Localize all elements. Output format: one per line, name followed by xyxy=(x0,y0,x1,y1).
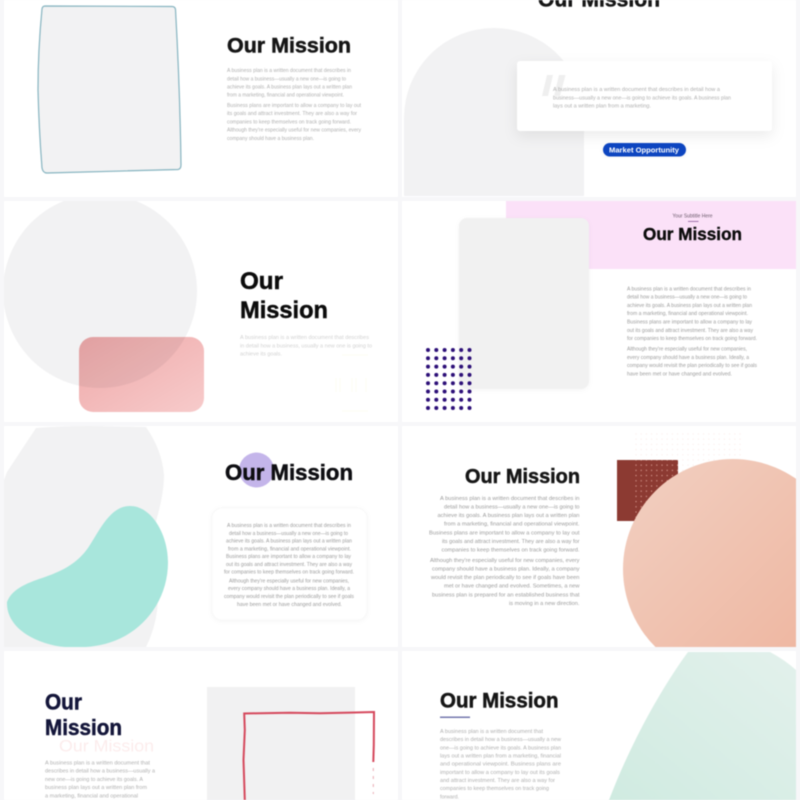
body text, right aligned: is moving in a new direction. xyxy=(509,601,580,607)
mint blob xyxy=(7,506,168,647)
image frame with teal outline xyxy=(38,6,181,173)
body text: its goals and attract investment. They are also a way for xyxy=(227,111,357,117)
body text: for companies to keep themselves on track going forward. xyxy=(627,336,757,342)
heading: Our xyxy=(240,268,283,295)
pink rounded rectangle xyxy=(79,337,204,412)
body text: and operational viewpoint. Business plans are xyxy=(440,762,561,768)
panel: slide 3 xyxy=(78,271,372,412)
body text: lays out a written plan from a marketing, financial xyxy=(440,754,561,760)
panel: slide 2 xyxy=(509,0,731,158)
body text: achieve its goals. A business plan lays out a written plan xyxy=(227,84,352,90)
faint decoration xyxy=(336,355,368,411)
purple dot grid xyxy=(426,348,472,410)
body text, right aligned: met or have changed and evolved. Sometimes, a new xyxy=(444,584,580,590)
heading: Mission xyxy=(45,715,122,740)
body text, right aligned: would revisit the plan periodically to see if goals have been xyxy=(431,575,580,581)
quote card xyxy=(517,61,772,131)
mint organic shape xyxy=(609,652,796,800)
body text: business plan lays out a written plan from xyxy=(45,785,147,791)
card body text: out its goals and attract investment. They are also a way xyxy=(226,562,352,568)
body text: and attract investment. They are also a way for xyxy=(440,778,555,784)
body text: achieve its goals. A business plan lays out a written plan xyxy=(627,303,752,309)
card body text: achieve its goals. A business plan lays out a written plan xyxy=(226,538,352,544)
body text, right aligned: business plan is prepared for an established business that xyxy=(432,592,580,598)
quote text: A business plan is a written document that describes in detail how a xyxy=(553,87,720,93)
card body text: from a marketing, financial and operational viewpoint. xyxy=(228,546,351,552)
ghost heading: Our Mission xyxy=(59,737,154,756)
card body text: company would revisit the plan periodically to see if goals xyxy=(224,594,354,600)
body text, right aligned xyxy=(429,496,580,607)
card body text: Although they're especially useful for new companies, xyxy=(229,578,349,584)
pink header band xyxy=(506,201,796,269)
body text: one—is going to achieve its goals. A business plan xyxy=(440,745,561,751)
body text xyxy=(240,335,372,358)
heading: Our Mission xyxy=(227,34,351,58)
body text xyxy=(627,286,757,377)
heading: Our Mission xyxy=(440,690,558,712)
card body text: every company should have a business plan. Ideally, a xyxy=(228,586,350,592)
body text: important to allow a company to lay out its goals xyxy=(440,770,560,776)
body text: from a marketing, financial and operational viewpoint. xyxy=(627,311,748,317)
grey circle xyxy=(3,194,197,388)
grey image placeholder xyxy=(207,687,355,800)
heading: Our Mission xyxy=(643,224,742,244)
quote text xyxy=(553,87,731,110)
panel: slide 7 xyxy=(45,693,376,800)
body text: A business plan is a written document that describes in xyxy=(627,286,751,292)
body text: every company should have a business plan. Ideally, a xyxy=(627,355,749,361)
body text: A business plan is a written document that xyxy=(440,729,544,735)
card body text: Business plans are important to allow a company to lay xyxy=(226,554,351,560)
card body text xyxy=(224,523,354,608)
panel: slide 1 xyxy=(37,4,361,174)
body text: a marketing, financial and operational xyxy=(45,793,138,799)
dot pattern xyxy=(636,434,740,466)
body text: A business plan is a written document that xyxy=(45,760,151,766)
body text: A business plan is a written document that describes in xyxy=(227,68,351,74)
body text: Business plans are important to allow a company to lay xyxy=(627,320,752,326)
heading: Our Mission xyxy=(465,465,580,488)
body text, right aligned: company should have a business plan. Ideally, a company xyxy=(432,566,580,572)
peach circle xyxy=(622,458,796,648)
panel: slide 6 xyxy=(429,458,796,648)
body text, right aligned: companies to keep themselves on track going forward. xyxy=(442,548,580,554)
body text: achieve its goals. xyxy=(240,352,282,358)
grey organic shape xyxy=(4,426,164,647)
body text: describes in detail how a business—usually a xyxy=(45,768,155,774)
quote text: business—usually a new one—is going to achieve its goals. A business plan xyxy=(553,95,731,101)
icon: quotation mark xyxy=(542,75,566,96)
body text: A business plan is a written document that describes xyxy=(240,335,369,341)
body text: have been met or have changed and evolved. xyxy=(627,371,732,377)
heading: Mission xyxy=(240,297,328,324)
card body text: for companies to keep themselves on track going forward. xyxy=(224,570,354,576)
body text, right aligned: detail how a business—usually a new one—is going to xyxy=(444,504,580,510)
body text, right aligned: Although they're especially useful for new companies, every xyxy=(430,558,580,564)
text card xyxy=(224,522,354,608)
body text: out its goals and attract investment. They are also a way xyxy=(627,328,753,334)
body text: company would revisit the plan periodically to see if goals xyxy=(627,363,757,369)
body text, right aligned: its goals and attract investment. They are also a way for xyxy=(442,539,580,545)
body text, right aligned: Business plans are important to allow a company to lay out xyxy=(429,530,580,536)
heading xyxy=(45,690,122,740)
dots over red square xyxy=(635,460,678,521)
heading: Our xyxy=(45,690,82,714)
dark red square xyxy=(617,460,678,521)
body text: Although they're especially useful for new companies, xyxy=(627,346,747,352)
panel: slide 8 xyxy=(402,651,796,800)
body text, right aligned: A business plan is a written document that describes in xyxy=(440,496,580,502)
body text: in detail how a business, usually a new one is going to xyxy=(240,343,372,349)
body text: describes in detail how a business—usually a new xyxy=(440,737,561,743)
body text: companies to keep themselves on track going xyxy=(440,786,549,792)
body text: Although they're especially useful for new companies, every xyxy=(227,128,361,134)
body text xyxy=(45,760,155,799)
purple circle accent xyxy=(239,452,274,488)
red brush frame xyxy=(244,712,374,800)
heading underline xyxy=(440,716,470,718)
body text: Business plans are important to allow a company to lay out xyxy=(227,103,362,109)
card body text: detail how a business—usually a new one—is going to xyxy=(229,531,348,537)
body text xyxy=(227,68,362,142)
grey rounded image placeholder xyxy=(459,218,589,389)
heading xyxy=(240,271,328,320)
pill label: Market Opportunity: Market Opportunity xyxy=(609,146,680,154)
subtitle: Your Subtitle Here xyxy=(672,214,713,220)
body text, right aligned: from a marketing, financial and operational viewpoint. xyxy=(444,522,580,528)
grey arch shape xyxy=(404,28,584,196)
body text xyxy=(440,729,561,800)
pill label: Market Opportunity xyxy=(603,143,686,156)
panel: slide 4 xyxy=(425,201,796,411)
heading: Our Mission xyxy=(225,460,353,485)
card body text: A business plan is a written document that describes in xyxy=(227,523,351,529)
quote text: lays out a written plan from a marketing. xyxy=(553,104,651,110)
red brush fade on right side xyxy=(372,768,374,794)
body text, right aligned: achieve its goals. A business plan lays out a written plan xyxy=(438,513,580,519)
body text: detail how a business—usually a new one—is going to xyxy=(627,295,747,301)
panel: slide 5 xyxy=(6,452,354,648)
body text: from a marketing, financial and operational viewpoint. xyxy=(227,93,344,99)
body text: detail how a business—usually a new one—is going to xyxy=(227,76,346,82)
body text: companies to keep themselves on track going forward. xyxy=(227,120,351,126)
body text: new one—is going to achieve its goals. A xyxy=(45,777,144,783)
card body text: have been met or have changed and evolved. xyxy=(237,602,342,608)
body text: company should have a business plan. xyxy=(227,136,314,142)
